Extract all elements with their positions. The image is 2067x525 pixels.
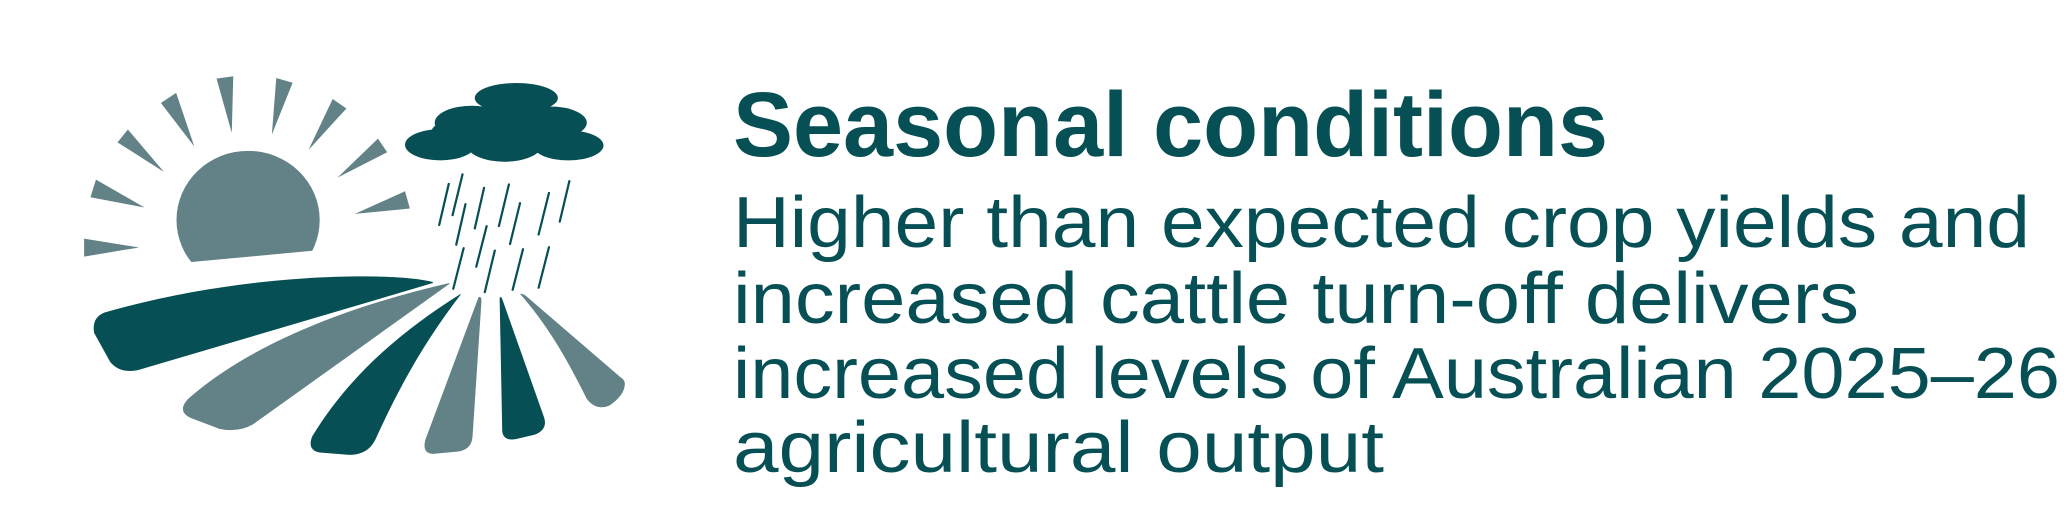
icon: sun, rain cloud and fields bbox=[84, 76, 625, 455]
icon: rain streaks bbox=[439, 174, 569, 292]
text block: summary: Higher than expected crop yields and bbox=[733, 183, 2030, 263]
icon: field rows bbox=[94, 276, 625, 455]
title: Seasonal conditions bbox=[733, 74, 1608, 176]
icon: setting sun bbox=[176, 150, 320, 262]
text block: summary: agricultural output bbox=[733, 408, 1384, 488]
text block: summary: increased cattle turn-off delivers bbox=[733, 259, 1859, 339]
icon: sun rays bbox=[84, 76, 410, 257]
icon: rain cloud bbox=[405, 83, 604, 162]
text block: summary: increased levels of Australian 2025–26 bbox=[733, 334, 2060, 414]
text block: summary bbox=[733, 183, 2060, 488]
